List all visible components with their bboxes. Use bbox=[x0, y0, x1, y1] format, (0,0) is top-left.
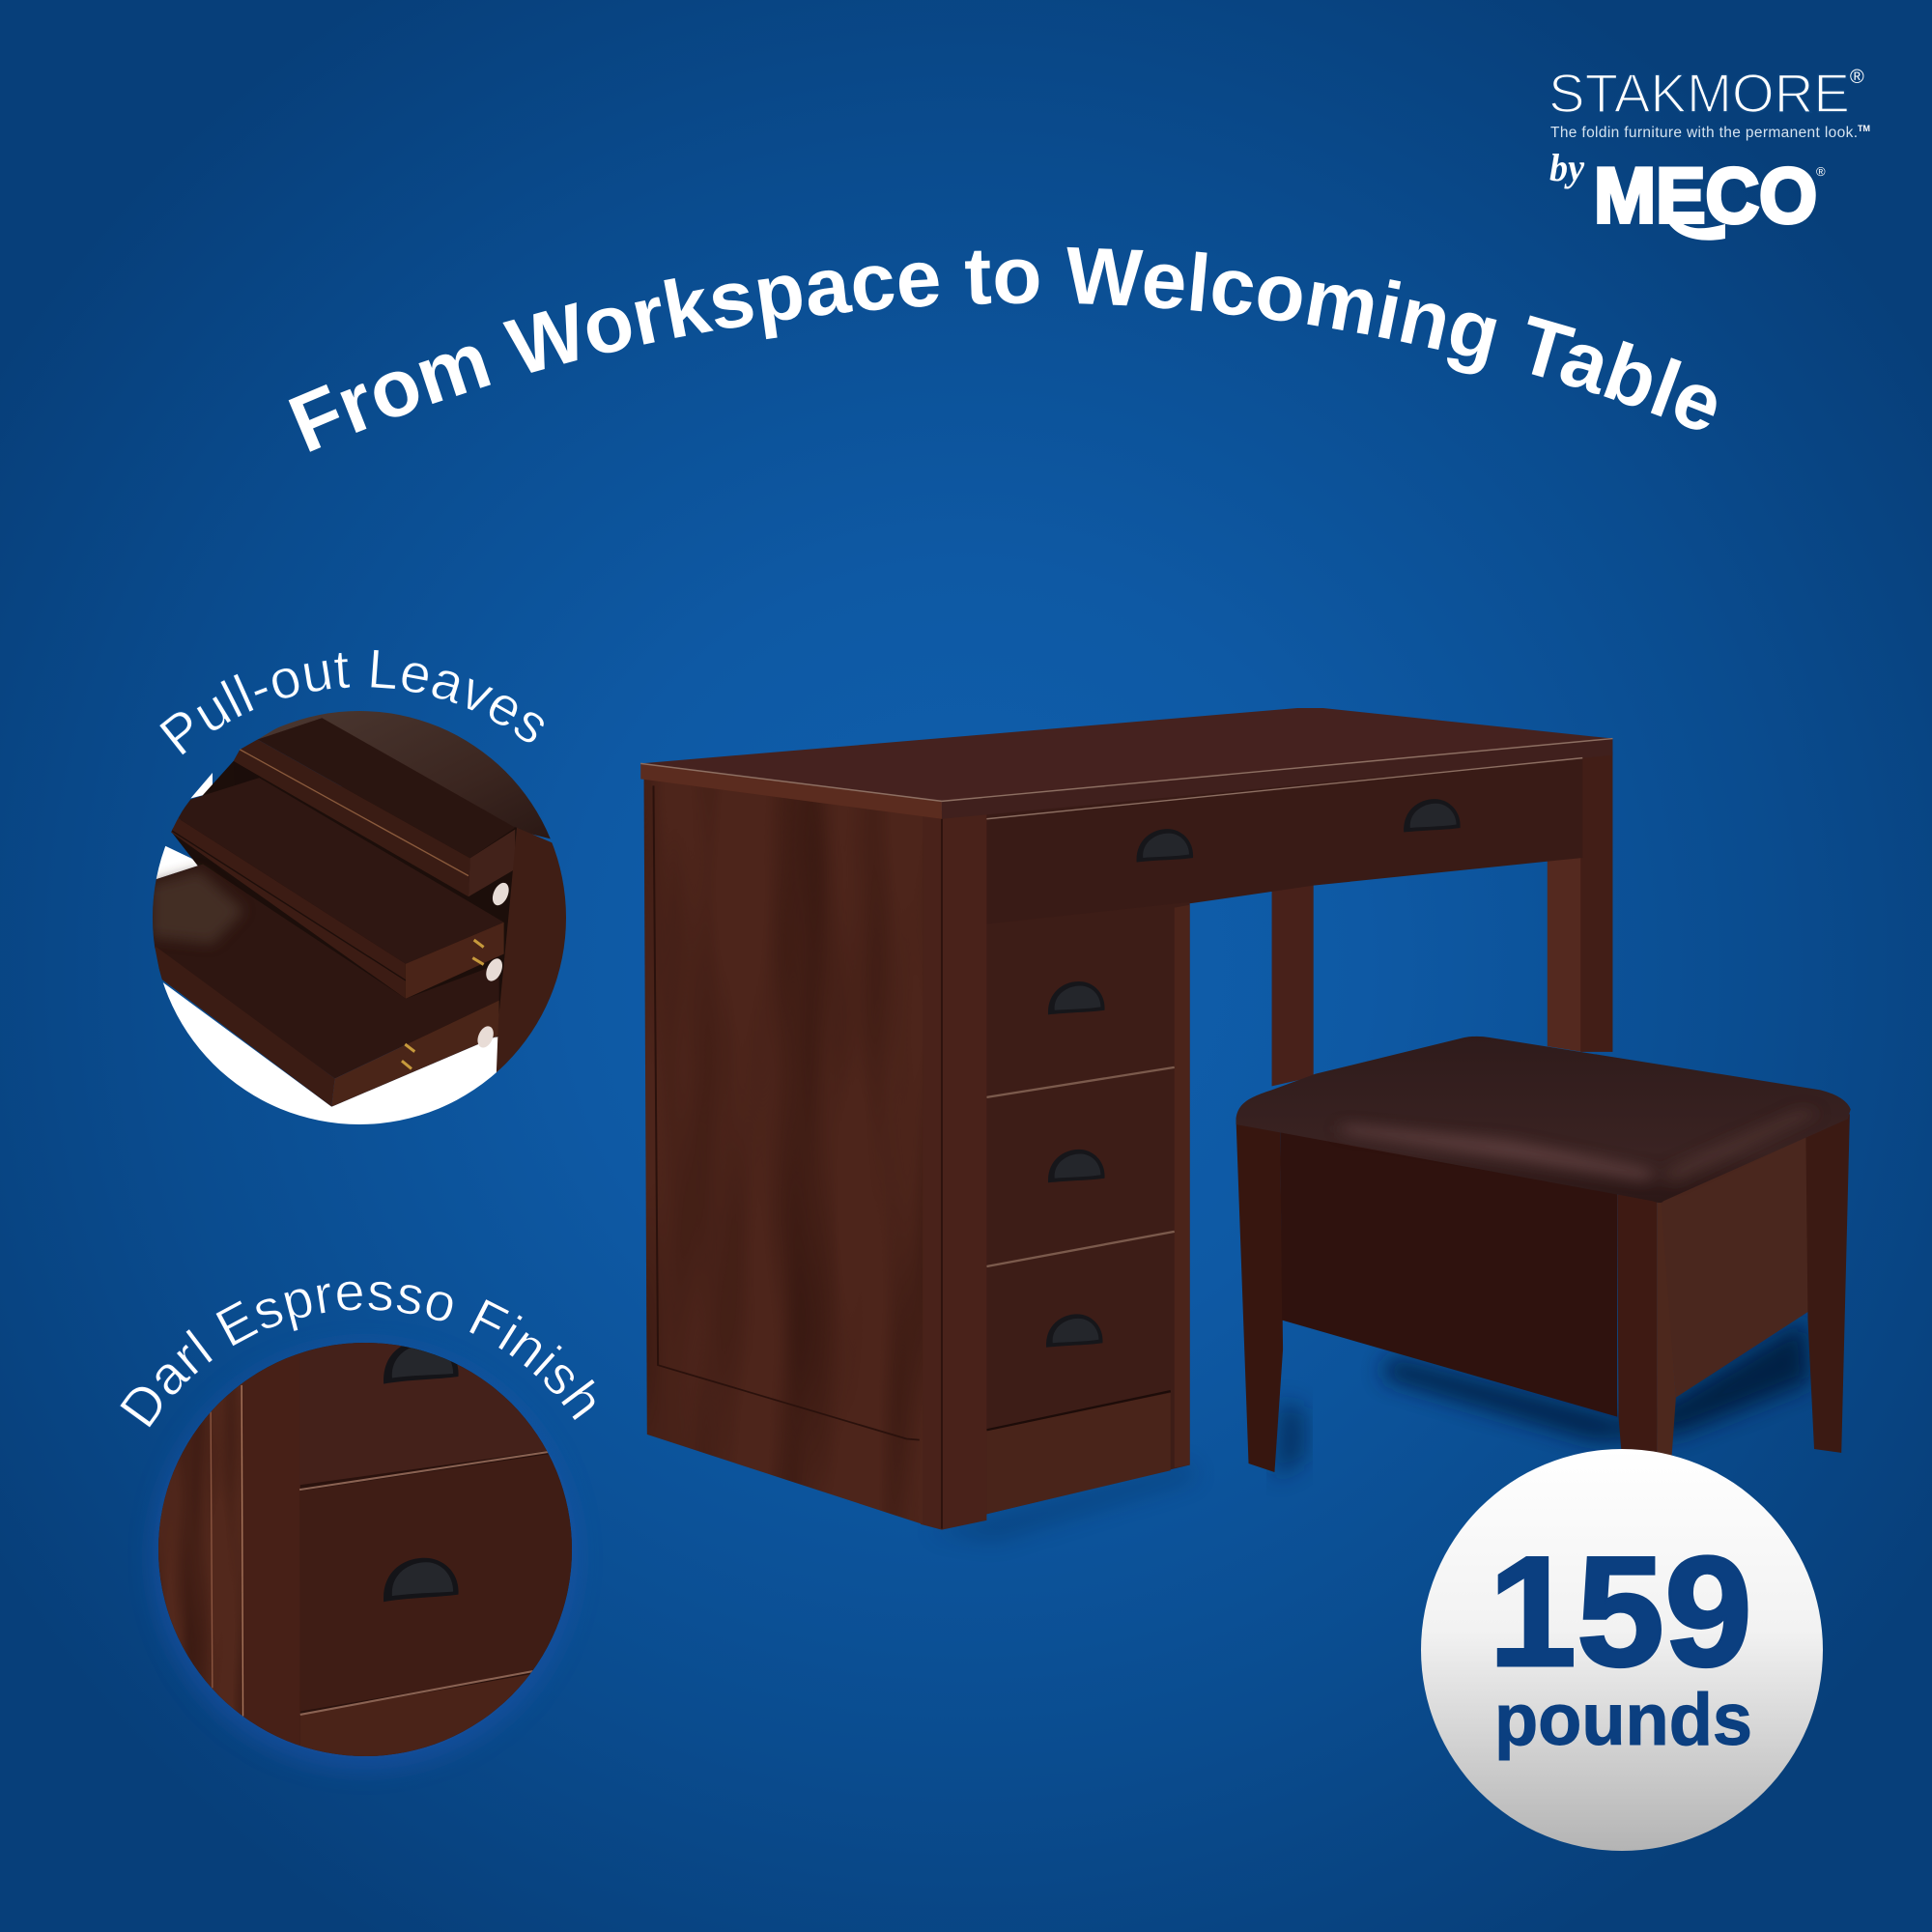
upper drawer handle bbox=[384, 1347, 458, 1383]
title: From Workspace to Welcoming Table bbox=[288, 247, 1717, 452]
brand name: STAKMORE bbox=[1548, 63, 1850, 125]
seat cushion bbox=[1236, 1037, 1851, 1203]
edge highlights bbox=[640, 739, 1612, 819]
by: by bbox=[1549, 146, 1584, 189]
bottom leaf bbox=[152, 865, 499, 1107]
centre stile bbox=[242, 1339, 300, 1761]
panel: pull-out leaves photo bbox=[153, 711, 566, 1124]
drawer handles bbox=[1046, 981, 1105, 1348]
side panel mouldings bbox=[653, 785, 942, 1528]
top leaf bbox=[234, 718, 515, 896]
middle leaf bbox=[169, 778, 504, 999]
right panel bbox=[1660, 1123, 1823, 1398]
registered mark: ® bbox=[1850, 67, 1864, 88]
logo: Stakmore by Meco bbox=[1548, 63, 1870, 241]
back leg bbox=[1272, 880, 1314, 1086]
front post bbox=[920, 810, 986, 1530]
bottom rail bbox=[300, 1675, 529, 1756]
top area behind leaves bbox=[257, 711, 551, 838]
white backdrop pieces bbox=[152, 773, 499, 1150]
support pegs bbox=[477, 883, 509, 1047]
drawer handle bbox=[384, 1558, 459, 1602]
badge: weight bbox=[1421, 1449, 1823, 1851]
label: Pull-out Leaves: Pull-out Leaves bbox=[158, 649, 544, 755]
photo backing bbox=[154, 1339, 576, 1761]
drawer lines bbox=[986, 1067, 1175, 1430]
apron bbox=[983, 753, 1582, 928]
left stile bbox=[158, 1383, 242, 1716]
grooves bbox=[211, 1385, 549, 1717]
weight unit: pounds bbox=[1494, 1679, 1752, 1761]
badge circle bbox=[1421, 1449, 1823, 1851]
Meco swoosh bbox=[1669, 214, 1725, 241]
trademark: TM bbox=[1858, 124, 1870, 133]
apron handles bbox=[1137, 799, 1461, 863]
Meco wordmark: MECO bbox=[1594, 153, 1817, 240]
tagline: The foldin furniture with the permanent look. bbox=[1550, 125, 1858, 141]
stack side strip bbox=[1175, 905, 1190, 1467]
table top front-left edge bbox=[640, 763, 942, 819]
top drawer bbox=[299, 1343, 547, 1485]
brass pins bbox=[402, 940, 484, 1068]
panel: espresso finish photo bbox=[154, 1339, 576, 1761]
left leg bbox=[1236, 1119, 1283, 1472]
front leg bbox=[1617, 1195, 1676, 1456]
table top bbox=[640, 708, 1612, 801]
weight number: 159 bbox=[1489, 1524, 1752, 1699]
stool bbox=[1236, 1037, 1851, 1472]
cabinet post bbox=[497, 828, 566, 1072]
drawer stack bbox=[983, 902, 1190, 1515]
glow behind finish photo bbox=[153, 1345, 578, 1770]
table top front-right edge bbox=[942, 739, 1612, 819]
front panel bbox=[1280, 1123, 1617, 1417]
side panel bbox=[644, 775, 923, 1524]
floor shadows bbox=[927, 1319, 1811, 1541]
right leg bbox=[1548, 752, 1612, 1052]
dark shadow between leaves bbox=[171, 761, 517, 1050]
desk bbox=[640, 708, 1612, 1530]
Meco registered mark: ® bbox=[1816, 164, 1826, 179]
label: Darl Espresso Finish: Darl Espresso Finish bbox=[120, 1281, 595, 1428]
plinth bbox=[983, 1393, 1171, 1515]
main drawer bbox=[299, 1450, 576, 1711]
right leg bbox=[1805, 1114, 1850, 1453]
seat highlights bbox=[1343, 1108, 1816, 1185]
